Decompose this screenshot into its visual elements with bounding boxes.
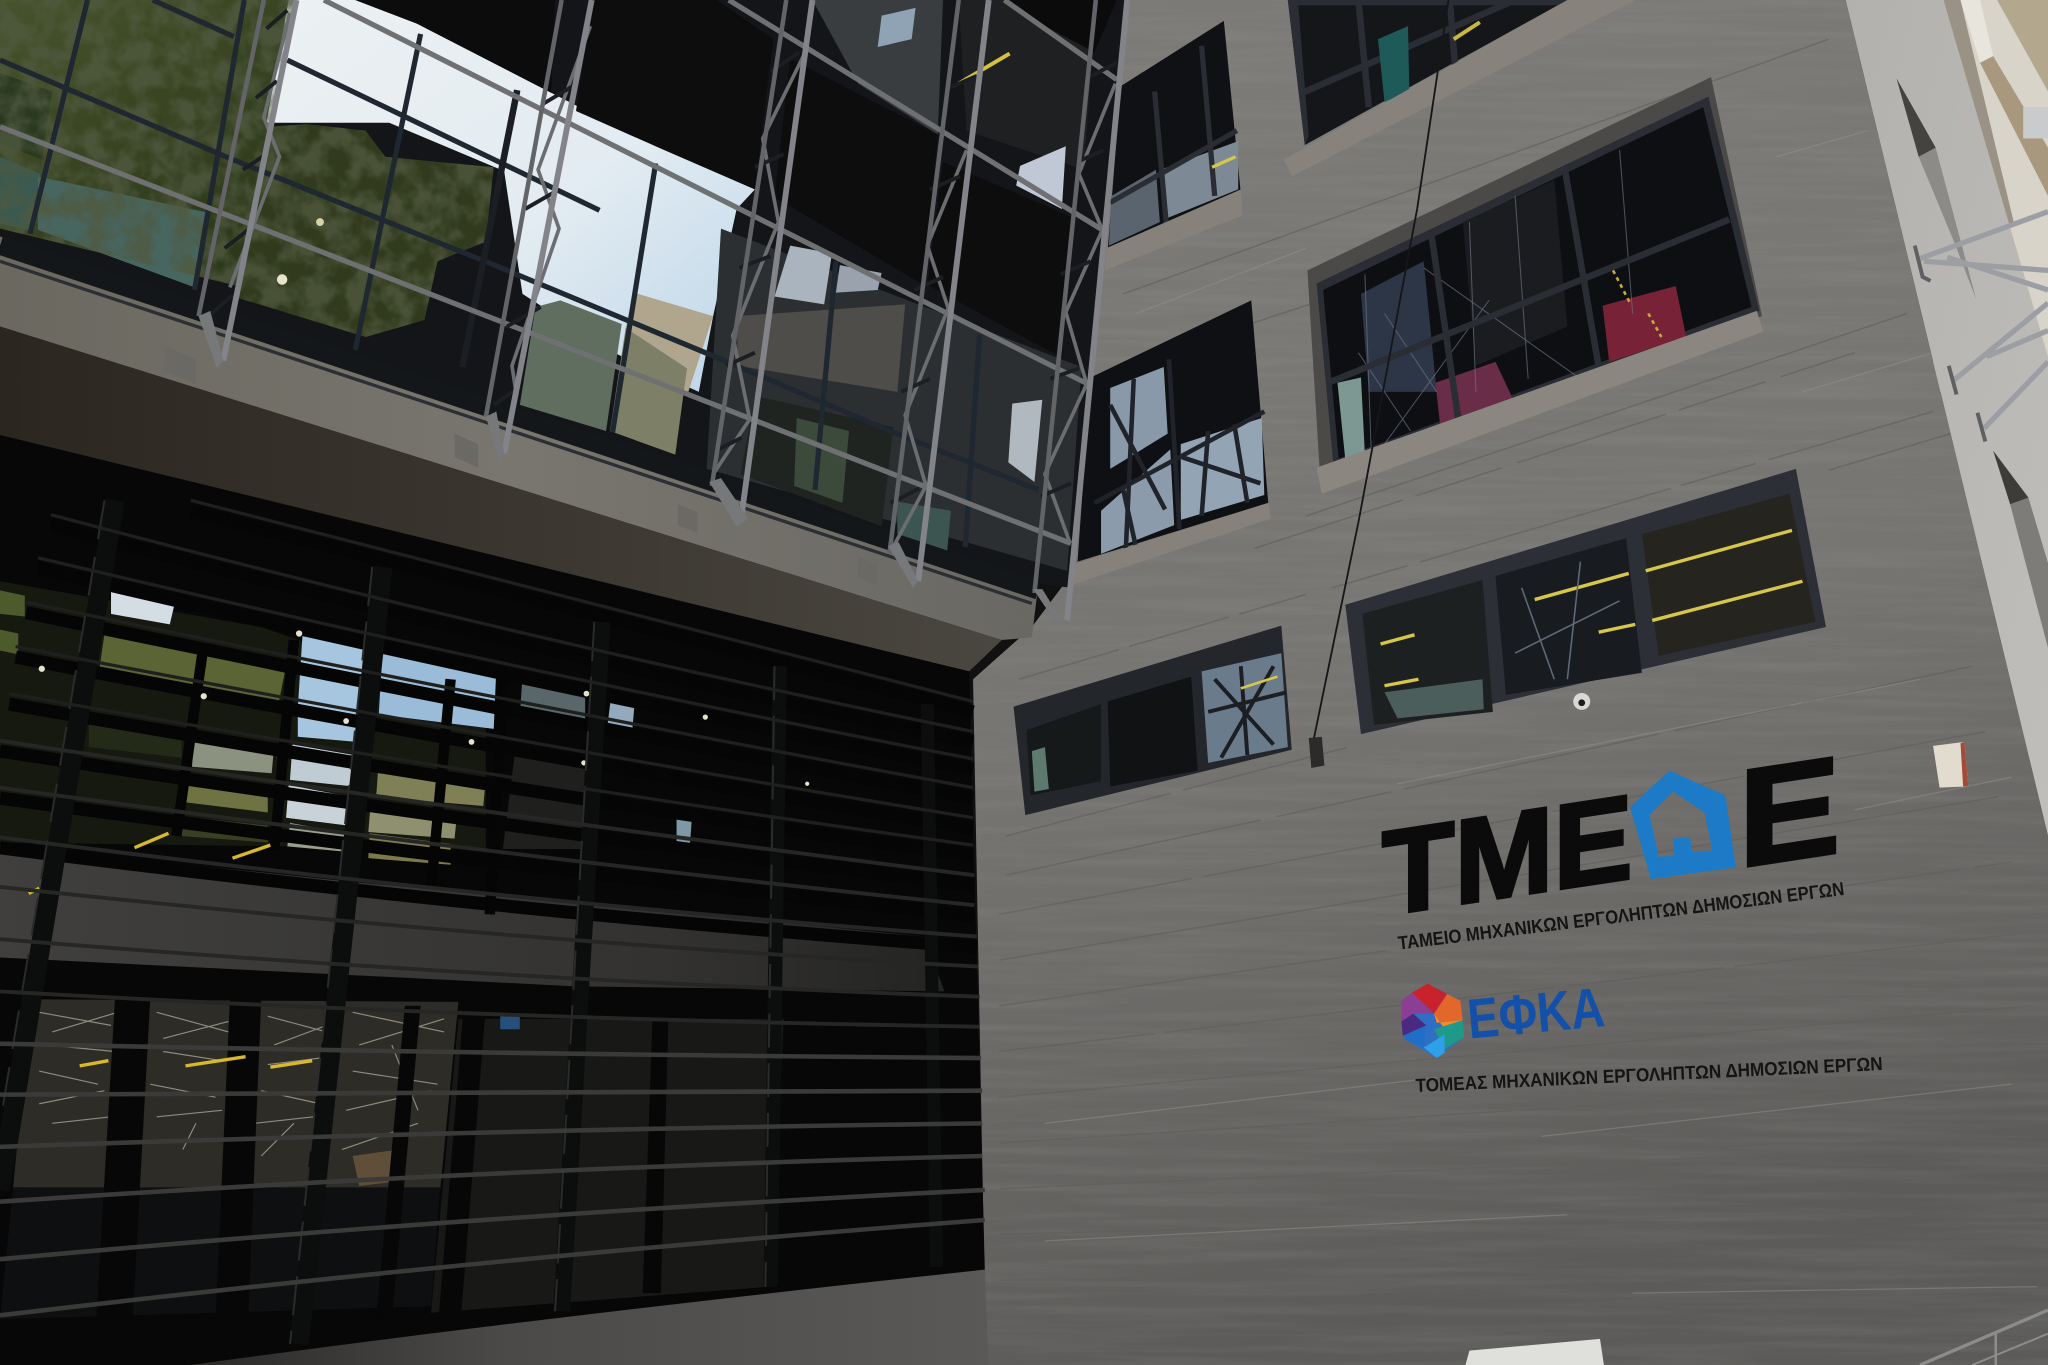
window: large upper right — [1307, 77, 1763, 494]
window: left lower — [1067, 300, 1271, 586]
interior upper columns — [176, 640, 503, 914]
mullions — [0, 0, 1038, 547]
logo: TMEΩE sign — [1382, 727, 1840, 942]
window: left upper — [1105, 21, 1242, 270]
EFKA subtitle: ΤΟΜΕΑΣ ΜΗΧΑΝΙΚΩΝ ΕΡΓΟΛΗΠΤΩΝ ΔΗΜΟΣΙΩΝ ΕΡΓΩΝ — [1415, 1054, 1883, 1097]
concrete beam under glazing — [0, 236, 1038, 671]
reflected upper right wall — [812, 0, 943, 135]
reflected tree centre — [238, 124, 494, 337]
TMEDE subtitle: ΤΑΜΕΙΟ ΜΗΧΑΝΙΚΩΝ ΕΡΓΟΛΗΠΤΩΝ ΔΗΜΟΣΙΩΝ ΕΡΓΩΝ — [1397, 879, 1845, 955]
louvre slats — [0, 500, 985, 1315]
icon: house omega — [1630, 771, 1736, 879]
logo: EFKA hexagon — [1401, 984, 1464, 1058]
concrete base under louvres — [191, 1270, 989, 1365]
ceiling lights — [277, 274, 287, 285]
logo letter E: Ε — [1738, 727, 1840, 897]
logo word EFKA: ΕΦΚΑ — [1465, 975, 1607, 1050]
side wall — [1846, 0, 2048, 836]
mesh panels — [355, 0, 555, 93]
main concrete wall — [967, 0, 2048, 1365]
security camera — [1573, 693, 1590, 710]
window: lower right with lights — [1345, 469, 1826, 734]
glazed facade with reflections — [0, 0, 1127, 603]
alarm box — [1933, 742, 1968, 788]
background: neighbouring building — [1933, 0, 2048, 392]
concrete band — [0, 845, 944, 991]
view through glass: lower branches — [13, 999, 458, 1190]
window: lower centre — [1014, 626, 1292, 815]
steel truss structure — [0, 0, 1127, 632]
reflected wall dark section — [707, 229, 1081, 571]
information plaque — [1465, 1339, 1604, 1365]
window: top centre — [1284, 0, 1635, 176]
vertical truss rails — [223, 0, 1127, 620]
reflected sky — [266, 0, 755, 392]
foliage texture — [0, 0, 522, 353]
zigzag bracing — [230, 13, 1115, 554]
view through glass: upper — [0, 581, 486, 849]
logo word TME: ΤΜΕ — [1382, 769, 1633, 942]
reflected tree left — [0, 0, 295, 286]
side wall struts — [1915, 212, 2048, 442]
louvre shadow bars — [0, 511, 977, 947]
interior lamps — [39, 630, 809, 786]
louvre panel background — [0, 435, 985, 1365]
louvre posts — [0, 500, 936, 1344]
horizontal rails — [0, 0, 1117, 543]
taut wire and anchor — [1309, 0, 1448, 768]
lights — [29, 833, 312, 1067]
truss feet — [199, 311, 223, 368]
reflected palm and building — [520, 300, 622, 431]
ramp railing — [1920, 1310, 2048, 1365]
